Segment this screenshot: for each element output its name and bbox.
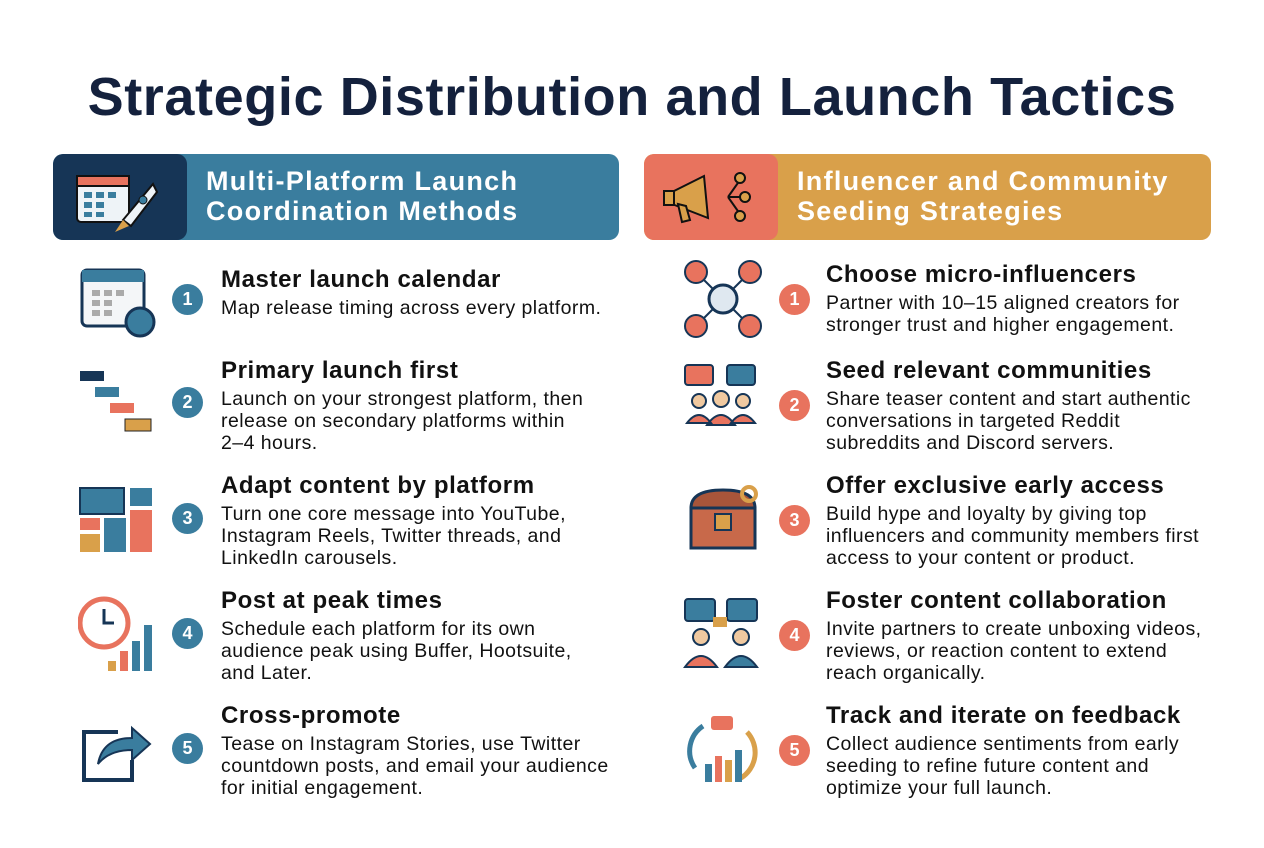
heading: Choose micro-influencers <box>826 261 1136 288</box>
panel: right items <box>683 260 1202 799</box>
number 1: 1 <box>789 289 800 309</box>
item 1 <box>80 266 601 338</box>
description: Launch on your strongest platform, then <box>221 388 583 410</box>
number 5 <box>172 733 203 764</box>
icon: collaboration <box>683 598 759 668</box>
icon: clock bars <box>78 596 152 671</box>
description: for initial engagement. <box>221 777 423 799</box>
description: access to your content or product. <box>826 547 1135 569</box>
description <box>221 503 566 569</box>
number 4: 4 <box>789 625 800 645</box>
number 3: 3 <box>789 510 800 530</box>
item 2 <box>80 357 583 454</box>
number 1: 1 <box>182 289 192 309</box>
number 1 <box>172 284 203 315</box>
icon: megaphone network <box>644 154 778 240</box>
banner: right <box>644 154 1211 240</box>
description: 2–4 hours. <box>221 432 318 454</box>
icon: cascade <box>80 371 152 432</box>
description: Partner with 10–15 aligned creators for <box>826 292 1180 314</box>
heading: Seed relevant communities <box>826 357 1152 384</box>
item 2 <box>684 357 1191 454</box>
heading: Post at peak times <box>221 587 443 614</box>
description: audience peak using Buffer, Hootsuite, <box>221 640 572 662</box>
item 3 <box>79 472 566 569</box>
number 3 <box>172 503 203 534</box>
description <box>826 733 1179 799</box>
icon: calendar clock <box>80 268 156 338</box>
banner heading <box>206 166 518 226</box>
icon: community <box>684 364 757 426</box>
description: Share teaser content and start authentic <box>826 388 1191 410</box>
icon: content grid <box>79 487 152 552</box>
description: Instagram Reels, Twitter threads, and <box>221 525 561 547</box>
number 1 <box>779 284 810 315</box>
description <box>826 618 1202 684</box>
banner heading: Seeding Strategies <box>797 196 1063 226</box>
number 5: 5 <box>789 740 800 760</box>
description: Build hype and loyalty by giving top <box>826 503 1147 525</box>
heading: Cross-promote <box>221 702 401 729</box>
number 4 <box>172 618 203 649</box>
icon: feedback loop <box>687 716 758 782</box>
number 2 <box>779 390 810 421</box>
item 4 <box>78 587 572 684</box>
item 5 <box>687 702 1181 799</box>
description: optimize your full launch. <box>826 777 1052 799</box>
description: and Later. <box>221 662 312 684</box>
item 3 <box>690 472 1199 569</box>
description: stronger trust and higher engagement. <box>826 314 1174 336</box>
banner heading <box>797 166 1169 226</box>
description: Tease on Instagram Stories, use Twitter <box>221 733 581 755</box>
panel: left items <box>78 266 609 799</box>
description <box>826 292 1180 336</box>
description: conversations in targeted Reddit <box>826 410 1120 432</box>
description: subreddits and Discord servers. <box>826 432 1114 454</box>
description <box>221 618 572 684</box>
description: Collect audience sentiments from early <box>826 733 1179 755</box>
heading: Primary launch first <box>221 357 458 384</box>
heading: Master launch calendar <box>221 266 501 293</box>
heading: Foster content collaboration <box>826 587 1167 614</box>
item 4 <box>683 587 1202 684</box>
description: influencers and community members first <box>826 525 1199 547</box>
icon: share arrow <box>82 726 152 782</box>
number 4: 4 <box>182 623 192 643</box>
description: countdown posts, and email your audience <box>221 755 609 777</box>
description <box>826 388 1191 454</box>
number 3 <box>779 505 810 536</box>
description <box>826 503 1199 569</box>
banner heading: Coordination Methods <box>206 196 518 226</box>
description: Schedule each platform for its own <box>221 618 535 640</box>
description: reach organically. <box>826 662 985 684</box>
banner: left <box>53 154 619 240</box>
title: Strategic Distribution and Launch Tactics <box>88 67 1176 127</box>
number 2 <box>172 387 203 418</box>
heading: Track and iterate on feedback <box>826 702 1181 729</box>
heading: Adapt content by platform <box>221 472 535 499</box>
description: Map release timing across every platform. <box>221 297 601 319</box>
number 5 <box>779 735 810 766</box>
heading: Offer exclusive early access <box>826 472 1164 499</box>
icon: treasure chest <box>690 485 758 550</box>
description <box>221 733 609 799</box>
item 1 <box>684 260 1180 338</box>
description: release on secondary platforms within <box>221 410 565 432</box>
description: Invite partners to create unboxing videos, <box>826 618 1202 640</box>
description <box>221 388 583 454</box>
number 4 <box>779 620 810 651</box>
number 2: 2 <box>789 395 800 415</box>
banner heading: Multi-Platform Launch <box>206 166 518 196</box>
icon: calendar rocket <box>53 154 187 240</box>
description: Turn one core message into YouTube, <box>221 503 566 525</box>
description: reviews, or reaction content to extend <box>826 640 1167 662</box>
description: seeding to refine future content and <box>826 755 1149 777</box>
description: LinkedIn carousels. <box>221 547 398 569</box>
icon: influencer network <box>684 260 762 338</box>
item 5 <box>82 702 609 799</box>
number 5: 5 <box>182 738 192 758</box>
banner heading: Influencer and Community <box>797 166 1169 196</box>
number 2: 2 <box>182 392 192 412</box>
number 3: 3 <box>182 508 192 528</box>
